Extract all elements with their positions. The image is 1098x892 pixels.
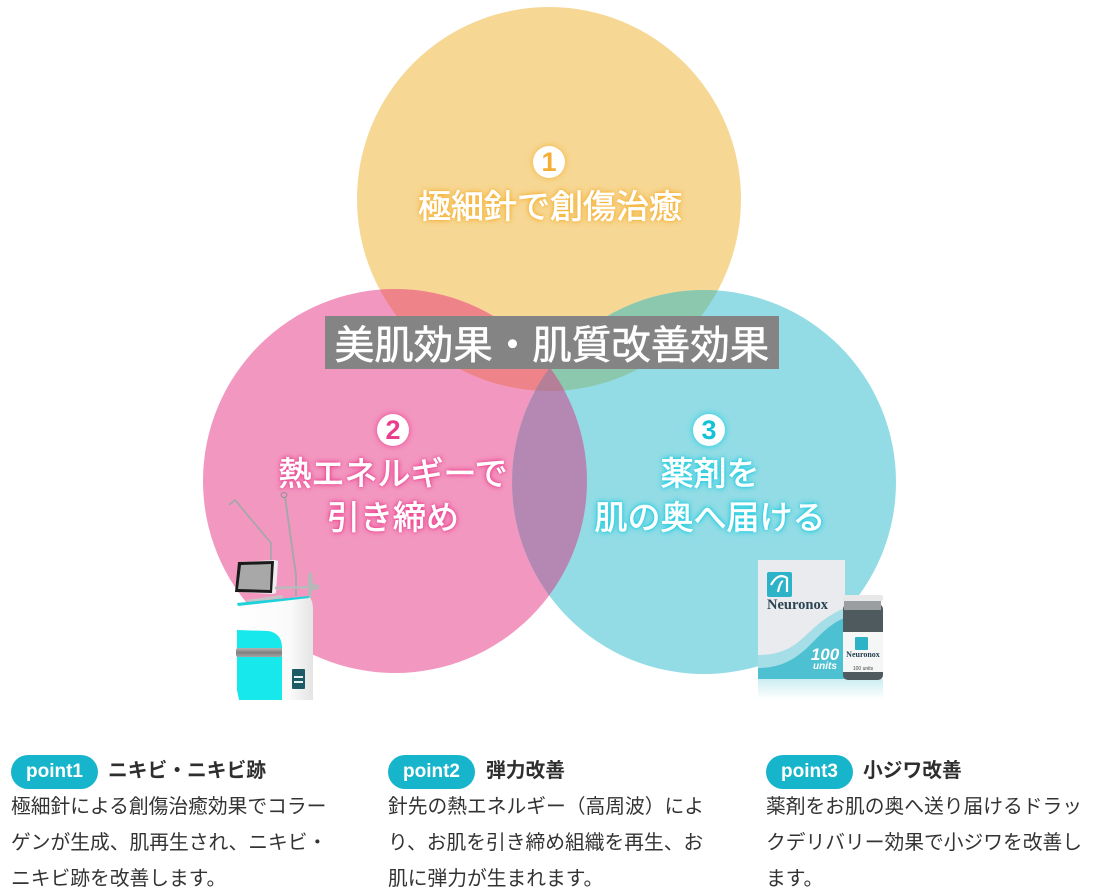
monitor — [235, 560, 278, 594]
text: 薬剤を肌の奥へ届ける: 薬剤を — [660, 455, 760, 492]
product image: Neuronox box and vial — [758, 560, 883, 696]
overlap: pink and cyan — [512, 369, 587, 596]
arm right — [285, 497, 296, 596]
body text 2: 肌に弾力が生まれます。 — [388, 868, 603, 890]
body text 3 — [766, 796, 1082, 890]
body text 3: ます。 — [766, 868, 823, 890]
product image: Neuronox box and vial: units — [813, 661, 837, 672]
circle 2: pink — [203, 289, 587, 673]
vial label — [843, 632, 883, 672]
100 units: 100 — [811, 645, 840, 664]
handle — [236, 648, 282, 657]
number badge 3 — [693, 414, 725, 446]
circle 3: cyan — [512, 290, 896, 674]
point 1 block — [11, 755, 327, 890]
number badge 2: 2 — [385, 415, 401, 445]
text: 極細針で創傷治癒: 極細針で創傷治癒 — [418, 188, 682, 225]
logo tile — [767, 572, 792, 597]
cyan panel — [237, 630, 282, 700]
box — [758, 560, 845, 679]
body text 2: り、お肌を引き締め組織を再生、お — [388, 832, 703, 854]
device image: laser machine — [228, 492, 319, 700]
number badge 1: 1 — [541, 147, 557, 177]
logo box — [292, 669, 305, 689]
arm left — [229, 500, 271, 562]
overlap: all three — [536, 369, 564, 391]
body text 1: ゲンが生成、肌再生され、ニキビ・ — [11, 832, 327, 854]
heading: 小ジワ改善: 小ジワ改善 — [863, 760, 962, 782]
text: 熱エネルギーで引き締め: 熱エネルギーで — [278, 455, 508, 492]
body text 3: 薬剤をお肌の奥へ送り届けるドラッ — [766, 796, 1082, 818]
circle 1: orange — [357, 7, 741, 391]
box wave — [758, 608, 845, 679]
body text 1: 極細針による創傷治癒効果でコラー — [11, 796, 326, 818]
handpiece — [308, 572, 319, 600]
body text 1: ニキビ跡を改善します。 — [11, 868, 226, 890]
badge: point1: point1 — [26, 761, 83, 782]
circle 2 label — [277, 410, 508, 536]
overlap: orange and cyan — [535, 290, 718, 390]
reflection — [758, 679, 883, 699]
machine body — [237, 597, 313, 700]
product image: Neuronox box and vial: Neuronox — [846, 650, 880, 659]
heading: 弾力改善: 弾力改善 — [486, 760, 565, 782]
badge: point1 — [11, 755, 98, 789]
badge: point3 — [766, 755, 853, 789]
number badge 1 — [533, 146, 565, 178]
central label: 美肌効果・肌質改善効果: 美肌効果・肌質改善効果 — [335, 324, 769, 368]
body text 2: 針先の熱エネルギー（高周波）によ — [388, 796, 704, 818]
text: 熱エネルギーで引き締め: 引き締め — [327, 499, 459, 536]
brand name: Neuronox — [767, 597, 829, 613]
body text 2 — [388, 796, 704, 890]
text: 熱エネルギーで引き締め — [277, 454, 508, 536]
circle 1 label — [416, 142, 684, 226]
venn diagram — [203, 7, 896, 674]
point 3 block — [766, 755, 1082, 890]
point 2 block — [388, 755, 704, 890]
number badge 3: 3 — [701, 415, 717, 445]
badge: point3: point3 — [781, 761, 838, 782]
number badge 2 — [377, 414, 409, 446]
product image: Neuronox box and vial: 100 units — [853, 666, 874, 672]
vial cap — [842, 595, 883, 601]
heading: ニキビ・ニキビ跡: ニキビ・ニキビ跡 — [108, 760, 266, 782]
text: 薬剤を肌の奥へ届ける: 肌の奥へ届ける — [594, 499, 826, 536]
overlap: orange and pink — [380, 289, 548, 390]
badge: point2: point2 — [403, 761, 460, 782]
badge: point2 — [388, 755, 475, 789]
body text 1 — [11, 796, 327, 890]
vial body — [843, 604, 883, 680]
cyan lid — [237, 596, 309, 606]
circle 3 label — [592, 409, 826, 536]
text: 薬剤を肌の奥へ届ける — [592, 453, 826, 536]
body text 3: クデリバリー効果で小ジワを改善し — [766, 832, 1082, 854]
